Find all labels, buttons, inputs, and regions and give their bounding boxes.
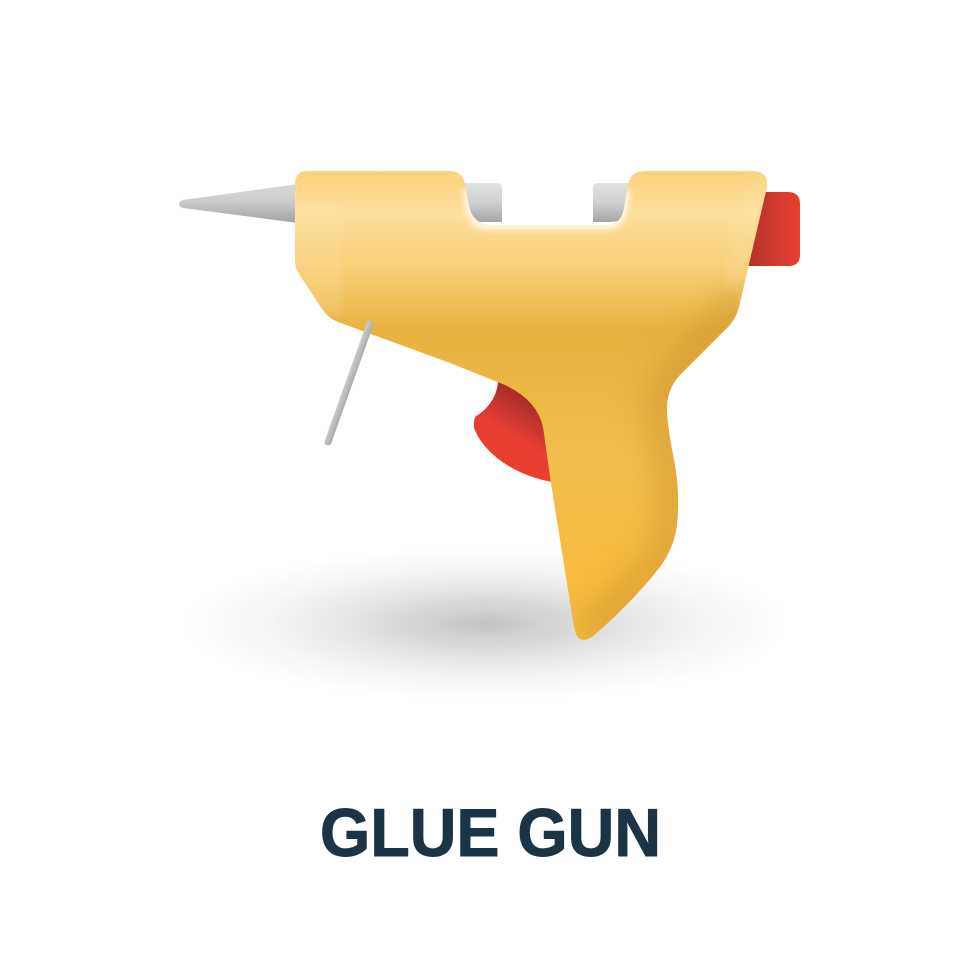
- gun body: [290, 171, 775, 640]
- wire stand: [328, 324, 370, 442]
- top edge glow: [290, 168, 775, 176]
- silver tab left: [460, 183, 502, 222]
- notch edge glow: [466, 190, 627, 226]
- red trigger: [474, 382, 560, 482]
- right side shading: [592, 300, 745, 632]
- red rear button: [735, 192, 800, 266]
- nozzle tip: [179, 184, 298, 223]
- left lighter band: [295, 249, 342, 316]
- top right highlight: [726, 239, 746, 285]
- silver tab right: [593, 183, 636, 222]
- icon: glue gun: [179, 171, 800, 640]
- title: GLUE GUN: [320, 795, 661, 871]
- ground shadow: [187, 548, 787, 700]
- infographic: glue gun icon with title: [179, 171, 800, 857]
